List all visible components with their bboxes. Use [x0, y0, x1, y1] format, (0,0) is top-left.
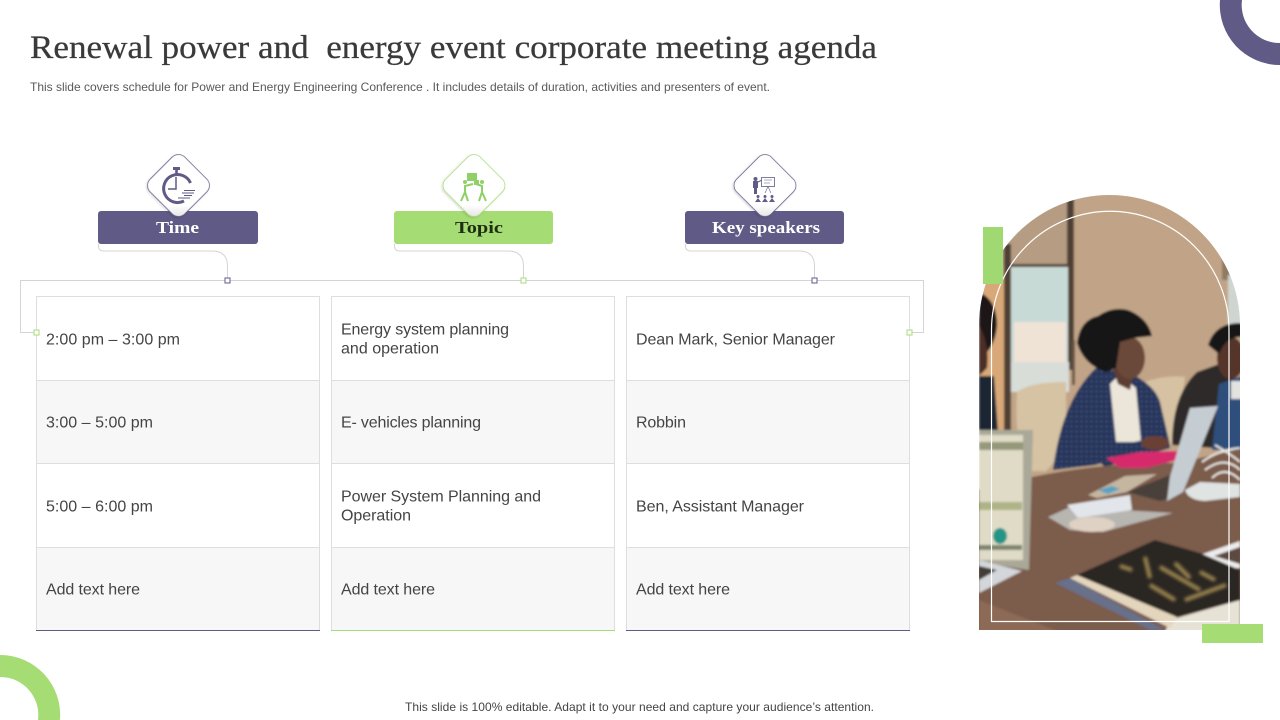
notebook	[1055, 578, 1165, 630]
right laptop	[1088, 474, 1157, 498]
icon: stopwatch	[164, 167, 195, 203]
left woman	[979, 292, 997, 358]
centre woman hair	[1077, 309, 1152, 372]
chairs	[1016, 382, 1066, 471]
phone near notebook	[1200, 541, 1240, 568]
banner: Time	[98, 211, 258, 244]
table	[975, 448, 1244, 632]
table column: Topic	[331, 296, 615, 631]
window	[1004, 244, 1011, 459]
centre woman jacket	[1053, 368, 1170, 470]
cell text	[341, 488, 541, 524]
header: Time	[98, 151, 258, 244]
icon: presenter at board	[753, 177, 775, 202]
corner ring: bottom left	[0, 655, 60, 720]
cell text: E- vehicles planning	[341, 414, 481, 432]
cell text: Add text here	[341, 582, 435, 598]
photo outline	[992, 211, 1229, 622]
cell text: Add text here	[636, 582, 730, 598]
subtitle: This slide covers schedule for Power and Energy Engineering Conference . It includes details of duration, activities and presenters of event.	[30, 80, 770, 94]
connector node: right	[907, 330, 912, 335]
cell text: Power System Planning and	[341, 488, 541, 506]
connector frame	[20, 244, 924, 332]
pink folder	[1106, 451, 1177, 468]
centre woman neck and face	[1112, 366, 1135, 390]
wall	[1003, 195, 1240, 478]
cell text: Energy system planning	[341, 322, 509, 338]
table column: Time	[36, 296, 320, 631]
header: Topic	[394, 151, 553, 244]
accent block: bottom right	[1202, 624, 1263, 643]
icon: two people with blocks	[461, 173, 486, 201]
cell text: Ben, Assistant Manager	[636, 498, 805, 516]
connector node: left	[34, 330, 39, 335]
diamond badge: Topic	[439, 151, 509, 220]
diamond badge: Time	[144, 151, 213, 220]
banner: Key speakers	[685, 211, 844, 244]
diamond badge: Key speakers	[730, 151, 800, 220]
left laptop	[979, 430, 1033, 570]
banner label: Topic: Topic	[455, 218, 504, 237]
cell text: Robbin	[636, 414, 686, 432]
accent block: left	[983, 227, 1003, 284]
cell text: and operation	[341, 340, 439, 358]
banner label: Key speakers: Key speakers	[712, 218, 820, 237]
right woman	[1172, 363, 1242, 450]
photo: meeting around a table	[975, 190, 1245, 632]
corner ring: top right	[1220, 0, 1280, 65]
cell text: Add text here	[46, 582, 140, 598]
table column: Key speakers	[626, 296, 910, 631]
cell text: 5:00 – 6:00 pm	[46, 498, 153, 516]
banner label: Time: Time	[156, 218, 200, 237]
footer note: This slide is 100% editable. Adapt it to your need and capture your audience’s attention.	[405, 700, 874, 714]
banner: Topic	[394, 211, 553, 244]
cell text	[341, 322, 509, 358]
cell text: Operation	[341, 508, 411, 524]
paper and mouse	[1048, 507, 1173, 532]
cell text: 2:00 pm – 3:00 pm	[46, 332, 180, 348]
phone and cables	[1185, 482, 1240, 501]
header: Key speakers	[685, 151, 844, 244]
cell text: 3:00 – 5:00 pm	[46, 414, 153, 432]
title: Renewal power and energy event corporate meeting agenda	[30, 30, 877, 66]
cell text: Dean Mark, Senior Manager	[636, 332, 836, 348]
